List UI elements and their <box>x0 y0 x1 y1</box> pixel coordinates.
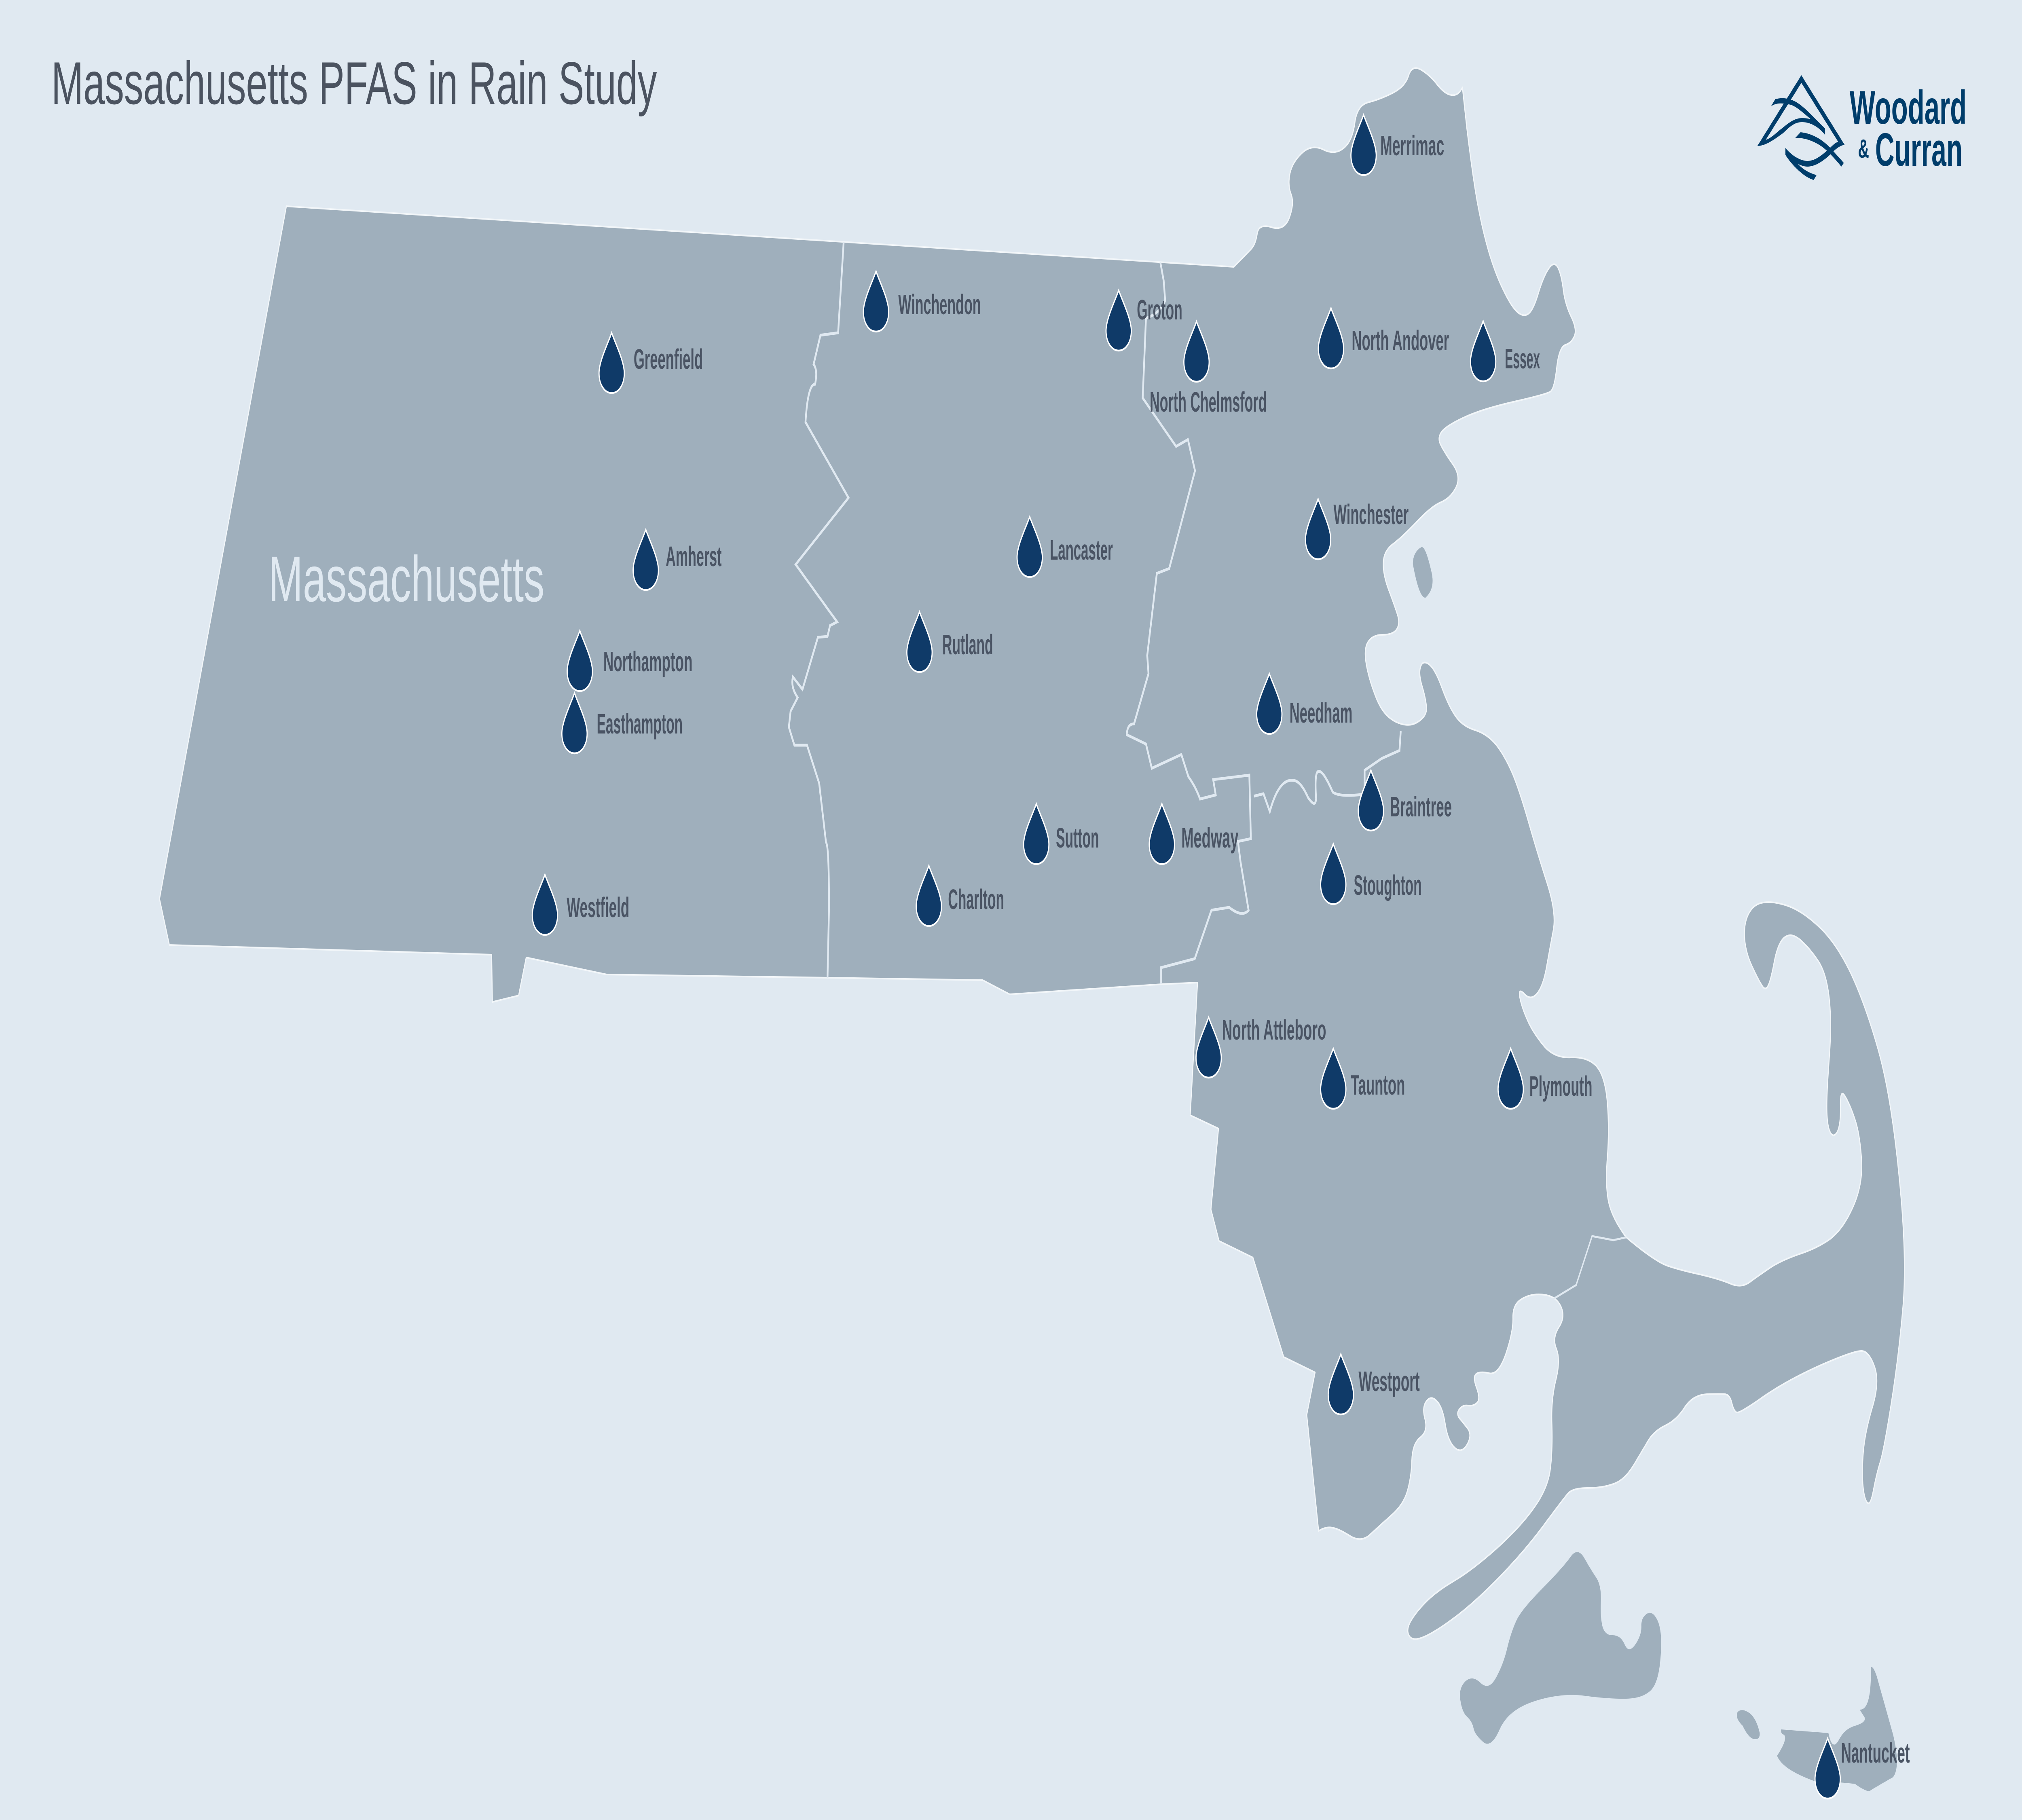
marker: Greenfield: Greenfield <box>634 344 703 375</box>
marker: Braintree <box>1358 770 1452 831</box>
marker: Nantucket <box>1815 1738 1910 1799</box>
marker: Sutton <box>1024 804 1099 864</box>
Tuckernuck island <box>1737 1710 1760 1739</box>
county boundary: west <box>789 242 848 978</box>
logo text <box>1850 81 1967 176</box>
marker: Charlton: Charlton <box>948 884 1004 915</box>
marker: Groton <box>1106 290 1182 351</box>
county boundary: south-east river <box>1254 731 1401 812</box>
marker: North Andover <box>1318 308 1449 368</box>
marker: Winchendon: Winchendon <box>898 289 981 321</box>
logo text: Curran <box>1875 124 1963 176</box>
marker: Amherst <box>633 530 721 590</box>
marker: Charlton <box>916 866 1004 926</box>
marker: North Attleboro: North Attleboro <box>1222 1015 1326 1046</box>
logo text: Woodard <box>1850 81 1967 134</box>
marker: Sutton: Sutton <box>1056 822 1099 854</box>
marker: North Chelmsford <box>1150 321 1267 418</box>
marker: Lancaster <box>1017 517 1113 577</box>
county boundary: central <box>1127 262 1251 984</box>
marker: Medway <box>1149 804 1239 864</box>
marker: Plymouth <box>1498 1048 1593 1109</box>
marker: Needham: Needham <box>1290 698 1352 729</box>
marker: Groton: Groton <box>1137 294 1182 326</box>
harbor island <box>1413 547 1433 598</box>
county boundary: Cape Cod <box>1553 1236 1626 1299</box>
marker: Westport <box>1328 1354 1420 1414</box>
marker: Stoughton: Stoughton <box>1354 870 1422 901</box>
marker: Stoughton <box>1321 844 1422 904</box>
marker: Northampton <box>567 631 692 691</box>
marker: Winchester <box>1305 499 1409 559</box>
marker: Westfield: Westfield <box>567 892 629 924</box>
marker: Easthampton <box>562 693 683 753</box>
marker: North Attleboro <box>1196 1015 1326 1078</box>
marker: Greenfield <box>599 333 703 393</box>
marker: Essex <box>1470 321 1540 381</box>
mainland and Cape Cod <box>159 68 1904 1639</box>
marker: Lancaster: Lancaster <box>1050 535 1113 566</box>
marker: Westport: Westport <box>1358 1366 1420 1397</box>
Martha's Vineyard <box>1460 1552 1661 1744</box>
marker: Westfield <box>532 875 629 935</box>
marker: Essex: Essex <box>1505 343 1540 375</box>
marker: Medway: Medway <box>1181 822 1239 854</box>
region label: Massachusetts: Massachusetts <box>269 543 544 615</box>
marker: Winchester: Winchester <box>1334 499 1409 531</box>
marker: North Andover: North Andover <box>1352 325 1449 357</box>
Nantucket island <box>1777 1667 1897 1791</box>
title: Massachusetts PFAS in Rain Study <box>51 50 657 117</box>
marker: Amherst: Amherst <box>666 541 721 573</box>
marker: Taunton <box>1321 1048 1405 1109</box>
logo mark <box>1758 75 1844 180</box>
logo: Woodard & Curran <box>1758 75 1967 180</box>
marker: North Chelmsford: North Chelmsford <box>1150 387 1267 418</box>
marker: Rutland: Rutland <box>942 629 993 661</box>
marker: Taunton: Taunton <box>1351 1070 1405 1101</box>
marker: Merrimac: Merrimac <box>1380 130 1444 162</box>
marker: Nantucket: Nantucket <box>1841 1738 1910 1769</box>
marker: Rutland <box>907 612 993 672</box>
marker: Braintree: Braintree <box>1390 791 1452 823</box>
logo text: & <box>1858 134 1869 163</box>
marker: Needham <box>1257 674 1352 734</box>
marker: Merrimac <box>1351 115 1444 175</box>
marker: Plymouth: Plymouth <box>1529 1071 1593 1102</box>
marker: Winchendon <box>863 271 981 332</box>
marker: Northampton: Northampton <box>603 646 692 678</box>
marker: Easthampton: Easthampton <box>597 708 683 740</box>
